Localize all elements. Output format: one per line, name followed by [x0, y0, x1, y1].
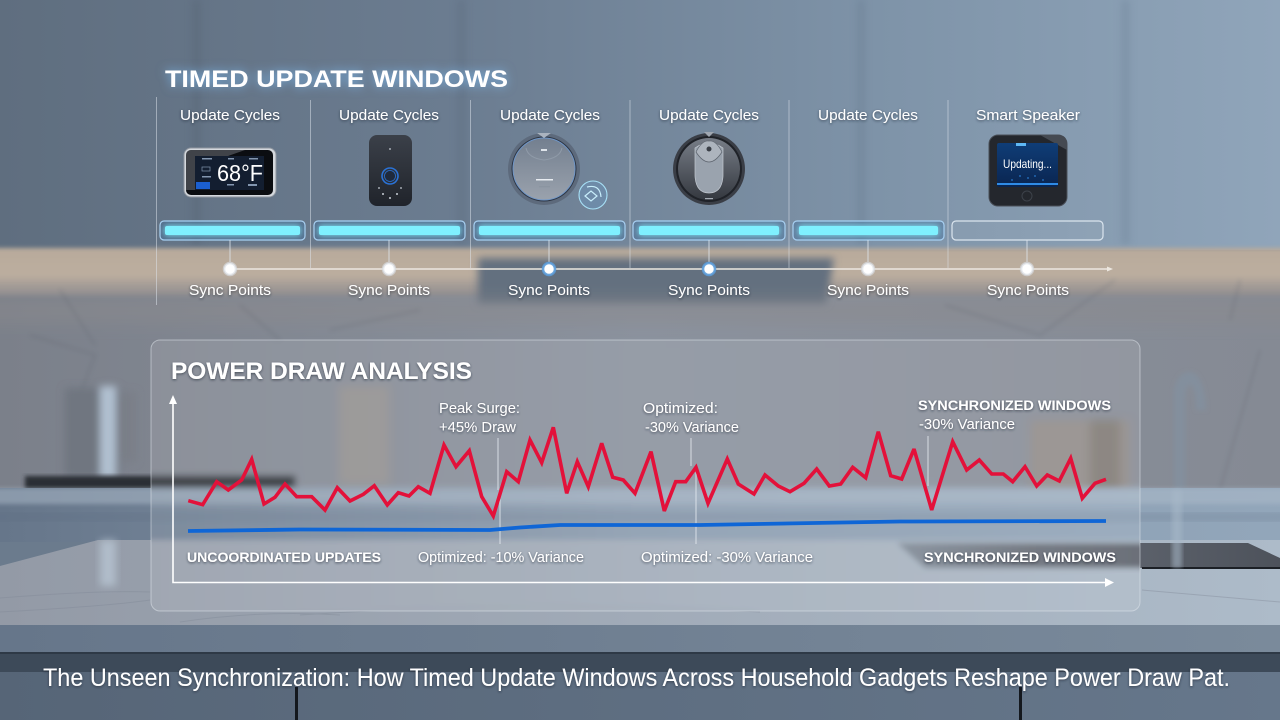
callout: synchronized windows variance [918, 397, 1111, 433]
icon: thermostat 68°F [184, 148, 276, 197]
labels: update cycles headers: Update Cycles [818, 107, 918, 124]
line: uncoordinated power draw [188, 427, 1106, 516]
callout: optimized variance: -30% Variance [645, 419, 739, 436]
callout: optimized variance [643, 400, 739, 436]
labels: update cycles headers: Update Cycles [659, 107, 759, 124]
label: optimized 30 percent variance: Optimized: -30% Variance [641, 549, 813, 566]
callout: synchronized windows variance: SYNCHRONIZED WINDOWS [918, 397, 1111, 413]
icon: smart hub [369, 135, 412, 206]
line: synchronized power draw [188, 521, 1106, 531]
labels: sync points [189, 282, 1069, 299]
icon: robot vacuum dark [673, 132, 745, 205]
leader lines [498, 436, 928, 544]
timeline axis with arrow [230, 240, 1113, 272]
icon: smart speaker updating: Updating... [1003, 157, 1052, 171]
label: uncoordinated updates: UNCOORDINATED UPDATES [187, 549, 381, 565]
labels: sync points: Sync Points [827, 282, 909, 299]
callout: synchronized windows variance: -30% Variance [919, 416, 1015, 433]
icon: thermostat 68°F: 68°F [217, 160, 263, 186]
panel: timed update windows timeline [156, 97, 1113, 305]
labels: update cycles headers [180, 107, 1080, 124]
callout: peak surge: +45% Draw [439, 419, 516, 436]
callout: peak surge: Peak Surge: [439, 400, 520, 417]
chart axes [169, 395, 1114, 587]
icon: smart speaker updating [989, 135, 1067, 206]
labels: update cycles headers: Update Cycles [339, 107, 439, 124]
sync point nodes [224, 263, 1033, 275]
icon: robot vacuum with sync badge [508, 133, 607, 209]
callout: optimized variance: Optimized: [643, 400, 718, 417]
heading: timed update windows: TIMED UPDATE WINDOWS [165, 66, 508, 93]
labels: sync points: Sync Points [987, 282, 1069, 299]
labels: sync points: Sync Points [508, 282, 590, 299]
labels: update cycles headers: Update Cycles [500, 107, 600, 124]
labels: sync points: Sync Points [668, 282, 750, 299]
panel: power draw analysis [150, 340, 1140, 612]
callout: peak surge [439, 400, 520, 436]
labels: sync points: Sync Points [348, 282, 430, 299]
labels: update cycles headers: Smart Speaker [976, 107, 1080, 124]
label: synchronized windows: SYNCHRONIZED WINDOWS [924, 549, 1116, 565]
labels: update cycles headers: Update Cycles [180, 107, 280, 124]
label: optimized 10 percent variance: Optimized: -10% Variance [418, 549, 584, 566]
heading: power draw analysis: POWER DRAW ANALYSIS [171, 358, 472, 385]
labels: sync points: Sync Points [189, 282, 271, 299]
caption: The Unseen Synchronization: How Timed Update Windows Across Household Gadgets Reshape Power Draw Pat. [43, 664, 1230, 692]
progress bars: update windows [160, 221, 1103, 240]
